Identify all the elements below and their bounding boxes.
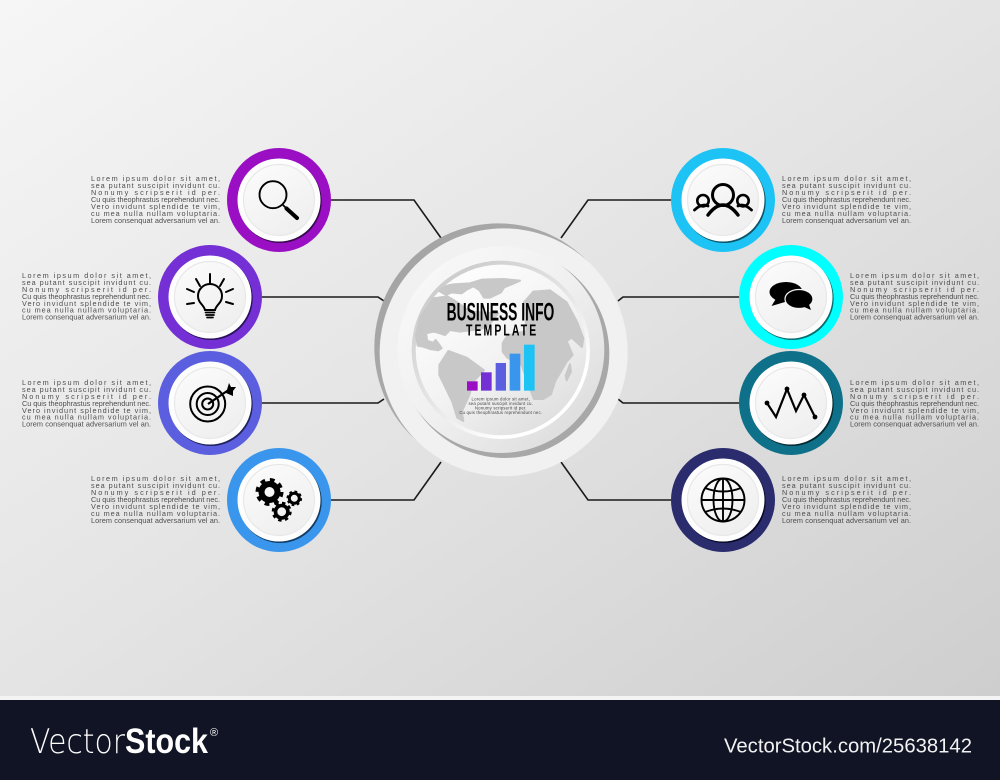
central globe emblem — [374, 223, 628, 476]
text block: left 1: Cu quis theophrastus reprehendunt nec. — [91, 195, 220, 204]
text block: left 2: sea putant suscipit invidunt cu. — [22, 278, 151, 287]
icon: people — [694, 184, 752, 215]
text block: right 2: Lorem consenquat adversarium vel an. — [850, 313, 979, 322]
text block: right 3: Cu quis theophrastus reprehendunt nec. — [850, 399, 979, 408]
text block: left 2 — [22, 271, 151, 322]
text block: right 2: Lorem ipsum dolor sit amet, — [850, 271, 979, 280]
text block: left 2: Lorem ipsum dolor sit amet, — [22, 271, 151, 280]
text block: right 1: cu mea nulla nullam voluptaria. — [782, 209, 911, 218]
connector lines — [262, 200, 739, 500]
icon: speech bubbles — [770, 282, 813, 310]
text block: right 4: sea putant suscipit invidunt cu. — [782, 481, 911, 490]
button: team — [671, 148, 775, 252]
text block: right 2: cu mea nulla nullam voluptaria. — [850, 306, 979, 315]
text block: right 4: Vero invidunt splendide te vim, — [782, 502, 911, 511]
text block: left 3: Lorem consenquat adversarium vel an. — [22, 420, 151, 429]
text block: right 3: Lorem ipsum dolor sit amet, — [850, 378, 979, 387]
bar chart — [467, 345, 535, 391]
text block: right 1 — [782, 174, 911, 225]
central caption: sea putant suscipit invidunt cu. — [468, 401, 533, 406]
text block: left 4: Cu quis theophrastus reprehendunt nec. — [91, 495, 220, 504]
button: target — [158, 351, 262, 455]
icon: light bulb — [187, 274, 233, 318]
icon: globe — [702, 478, 744, 522]
button: globe — [671, 448, 775, 552]
text block: left 4: Nonumy scripserit id per. — [91, 488, 220, 497]
text block: right 4: Lorem consenquat adversarium vel an. — [782, 516, 911, 525]
text block: left 1: Lorem ipsum dolor sit amet, — [91, 174, 220, 183]
text block: left 2: cu mea nulla nullam voluptaria. — [22, 306, 151, 315]
icon: target and arrow — [190, 383, 236, 422]
text block: right 1: Cu quis theophrastus reprehendunt nec. — [782, 195, 911, 204]
central caption: Nonumy scripserit id per. — [475, 405, 526, 410]
button: chart — [739, 351, 843, 455]
footer logo: Stock — [125, 722, 208, 761]
text block: left 3: Vero invidunt splendide te vim, — [22, 406, 151, 415]
footer logo: ® — [210, 727, 218, 739]
title: BUSINESS INFO — [447, 300, 554, 327]
subtitle: TEMPLATE — [466, 322, 536, 339]
text block: right 4: Lorem ipsum dolor sit amet, — [782, 474, 911, 483]
text block: left 4: Lorem consenquat adversarium vel an. — [91, 516, 220, 525]
text block: right 3: sea putant suscipit invidunt cu. — [850, 385, 979, 394]
text block: left 2: Cu quis theophrastus reprehendunt nec. — [22, 292, 151, 301]
text block: right 3: Nonumy scripserit id per. — [850, 392, 979, 401]
central caption: Cu quis theophrastus reprehendunt nec. — [459, 410, 542, 415]
text block: left 4: cu mea nulla nullam voluptaria. — [91, 509, 220, 518]
central caption — [459, 397, 542, 415]
world map — [416, 279, 583, 421]
text block: left 1: sea putant suscipit invidunt cu. — [91, 181, 220, 190]
text block: right 2 — [850, 271, 979, 322]
icon: zigzag line — [765, 387, 817, 419]
button: settings — [227, 448, 331, 552]
text block: left 1 — [91, 174, 220, 225]
footer logo — [30, 722, 218, 762]
text block: right 3: Vero invidunt splendide te vim, — [850, 406, 979, 415]
button: idea — [158, 245, 262, 349]
text block: left 2: Nonumy scripserit id per. — [22, 285, 151, 294]
text block: left 1: Nonumy scripserit id per. — [91, 188, 220, 197]
text block: left 3: Lorem ipsum dolor sit amet, — [22, 378, 151, 387]
text block: left 4: Lorem ipsum dolor sit amet, — [91, 474, 220, 483]
footer bar — [0, 700, 1000, 780]
text block: right 4: Cu quis theophrastus reprehendunt nec. — [782, 495, 911, 504]
text block: right 2: Vero invidunt splendide te vim, — [850, 299, 979, 308]
text block: right 4: Nonumy scripserit id per. — [782, 488, 911, 497]
text block: right 3: Lorem consenquat adversarium vel an. — [850, 420, 979, 429]
text block: right 2: Nonumy scripserit id per. — [850, 285, 979, 294]
text block: right 4: cu mea nulla nullam voluptaria. — [782, 509, 911, 518]
text block: left 3: Nonumy scripserit id per. — [22, 392, 151, 401]
text block: left 4: Vero invidunt splendide te vim, — [91, 502, 220, 511]
text block: left 4 — [91, 474, 220, 525]
text block: right 1: sea putant suscipit invidunt cu. — [782, 181, 911, 190]
text block: left 2: Vero invidunt splendide te vim, — [22, 299, 151, 308]
text block: right 2: Cu quis theophrastus reprehendunt nec. — [850, 292, 979, 301]
button: chat — [739, 245, 843, 349]
text block: right 1: Lorem ipsum dolor sit amet, — [782, 174, 911, 183]
text block: left 3 — [22, 378, 151, 429]
text block: right 1: Vero invidunt splendide te vim, — [782, 202, 911, 211]
text block: right 3: cu mea nulla nullam voluptaria. — [850, 413, 979, 422]
text block: right 1: Lorem consenquat adversarium vel an. — [782, 216, 911, 225]
text block: left 4: sea putant suscipit invidunt cu. — [91, 481, 220, 490]
text block: left 3: Cu quis theophrastus reprehendunt nec. — [22, 399, 151, 408]
text block: left 1: cu mea nulla nullam voluptaria. — [91, 209, 220, 218]
text block: right 4 — [782, 474, 911, 525]
icon: magnifier — [260, 181, 297, 218]
button: search — [227, 148, 331, 252]
text block: left 2: Lorem consenquat adversarium vel an. — [22, 313, 151, 322]
text block: right 3 — [850, 378, 979, 429]
icon: gears — [258, 480, 301, 520]
central caption: Lorem ipsum dolor sit amet, — [471, 397, 530, 402]
footer logo: Vector — [30, 722, 125, 762]
text block: left 1: Lorem consenquat adversarium vel an. — [91, 216, 220, 225]
text block: right 1: Nonumy scripserit id per. — [782, 188, 911, 197]
text block: right 2: sea putant suscipit invidunt cu. — [850, 278, 979, 287]
text block: left 3: sea putant suscipit invidunt cu. — [22, 385, 151, 394]
text block: left 1: Vero invidunt splendide te vim, — [91, 202, 220, 211]
text block: left 3: cu mea nulla nullam voluptaria. — [22, 413, 151, 422]
footer image id: VectorStock.com/25638142 — [724, 736, 972, 758]
